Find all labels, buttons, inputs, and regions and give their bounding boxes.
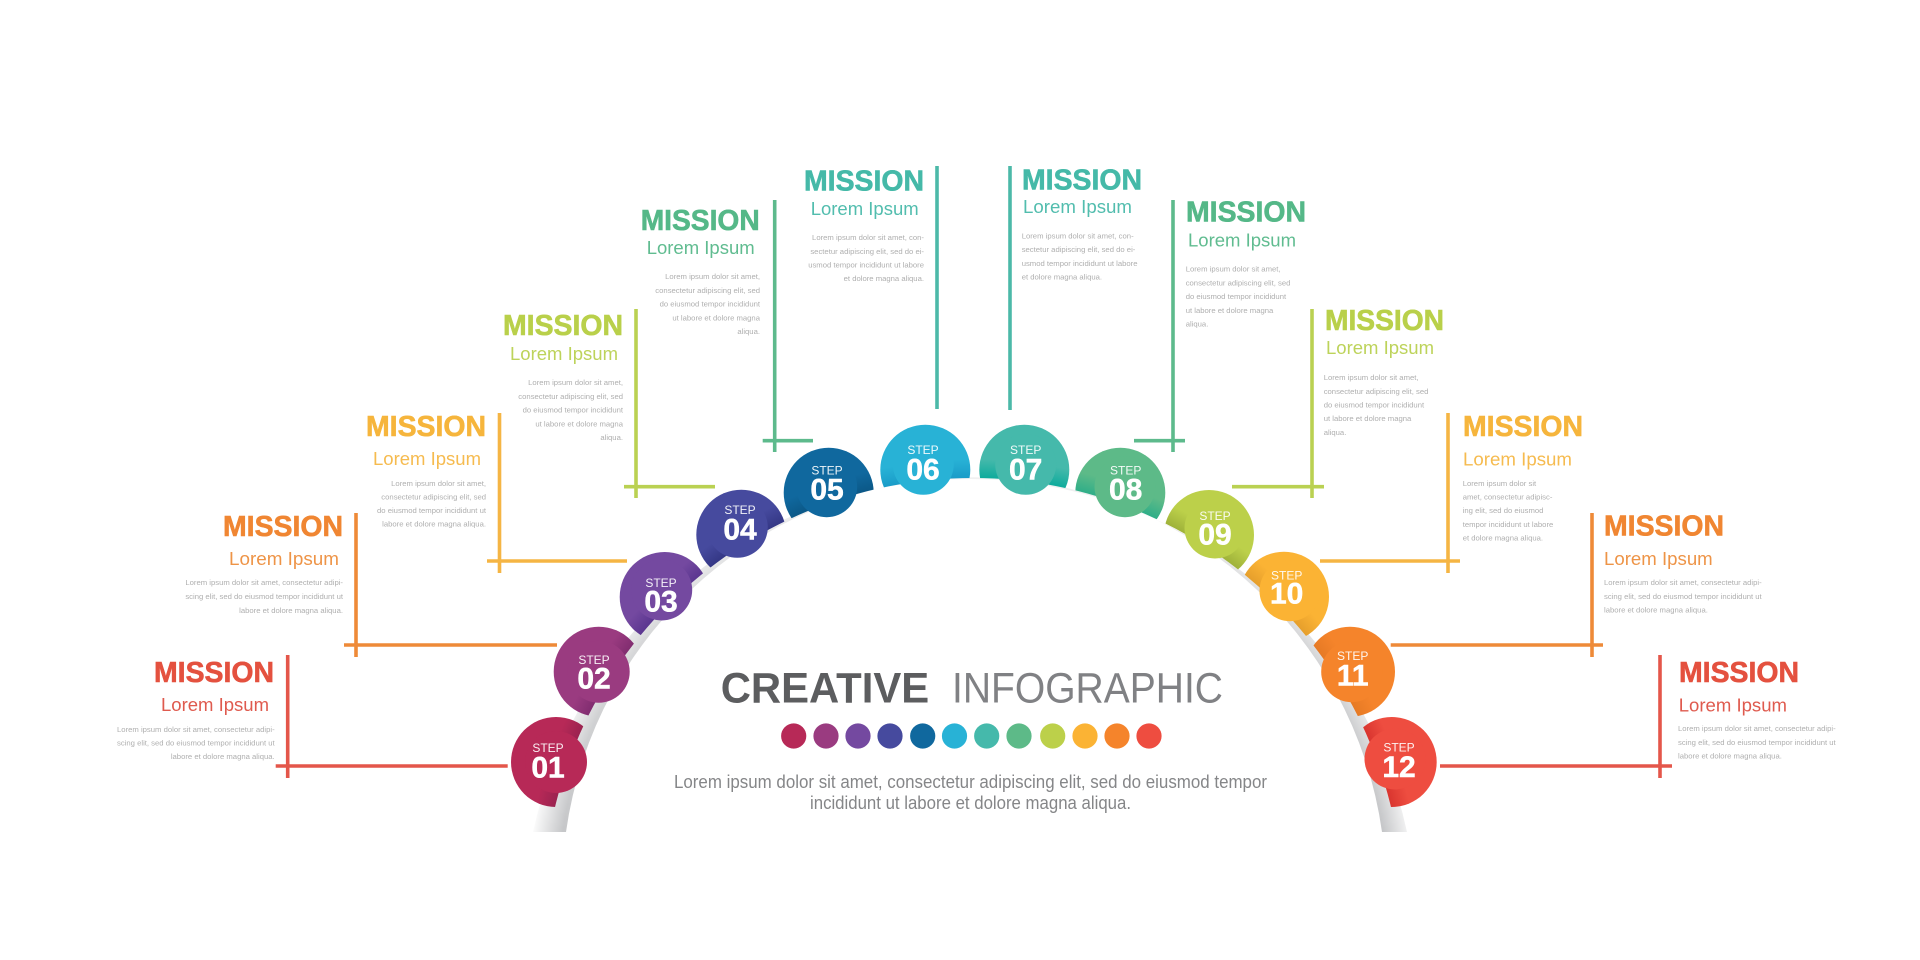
subheading 10: Lorem Ipsum <box>1463 449 1572 470</box>
intro paragraph: Lorem ipsum dolor sit amet, consectetur adipiscing elit, sed do eiusmod tempor <box>674 772 1267 792</box>
heading 02: MISSION <box>223 511 343 543</box>
description 06 <box>808 233 924 283</box>
description 10: Lorem ipsum dolor sit <box>1463 479 1537 488</box>
description 07: et dolore magna aliqua. <box>1022 273 1102 282</box>
description 05 <box>655 272 761 336</box>
subheading 01: Lorem Ipsum <box>161 694 269 715</box>
subheading 09: Lorem Ipsum <box>1326 337 1434 358</box>
step badge 06 <box>880 424 970 495</box>
step badge 01: 01 <box>531 752 565 784</box>
description 04: aliqua. <box>600 433 623 442</box>
description 05: Lorem ipsum dolor sit amet, <box>665 272 760 281</box>
description 10: et dolore magna aliqua. <box>1463 534 1543 543</box>
description 06: Lorem ipsum dolor sit amet, con- <box>812 233 924 242</box>
connector 12 <box>1440 655 1672 778</box>
step badge 01: STEP <box>532 741 564 755</box>
step badge 12: 12 <box>1382 751 1416 784</box>
title: CREATIVE <box>721 665 929 713</box>
description 05: consectetur adipiscing elit, sed <box>655 286 760 295</box>
intro paragraph <box>674 772 1267 813</box>
connector 03 <box>487 413 627 573</box>
description 03: Lorem ipsum dolor sit amet, <box>391 479 486 488</box>
description 02: scing elit, sed do eiusmod tempor incididunt ut <box>185 592 344 601</box>
panel: mission 07 <box>1010 164 1142 410</box>
step badge 10: STEP <box>1271 569 1302 583</box>
panel: mission 10 <box>1320 411 1583 573</box>
description 04: ut labore et dolore magna <box>535 419 624 428</box>
subheading 03: Lorem Ipsum <box>373 448 481 469</box>
description 12: labore et dolore magna aliqua. <box>1678 752 1782 761</box>
description 04: consectetur adipiscing elit, sed <box>518 392 623 401</box>
step badge 07: STEP <box>1010 443 1041 457</box>
description 03: do eiusmod tempor incididunt ut <box>377 506 487 515</box>
connector 11 <box>1391 513 1603 657</box>
step badge 11: 11 <box>1337 660 1369 692</box>
description 08 <box>1186 265 1290 329</box>
connector 07 <box>1008 166 1012 410</box>
description 07: sectetur adipiscing elit, sed do ei- <box>1022 245 1136 254</box>
connector 09 <box>1232 309 1324 498</box>
description 08: aliqua. <box>1186 320 1208 329</box>
step badge 04 <box>696 490 784 568</box>
step badge 12: STEP <box>1383 741 1415 755</box>
colour dot row <box>781 723 1162 749</box>
step badge 04: 04 <box>723 514 757 546</box>
subheading 07: Lorem Ipsum <box>1023 196 1132 217</box>
step badge 05: STEP <box>811 464 843 478</box>
subheading 04: Lorem Ipsum <box>510 343 618 364</box>
description 12: scing elit, sed do eiusmod tempor incididunt ut <box>1678 738 1837 747</box>
description 09: ut labore et dolore magna <box>1324 414 1412 423</box>
step badge 07 <box>979 424 1070 495</box>
description 03: labore et dolore magna aliqua. <box>382 520 486 529</box>
step badge 03: STEP <box>645 576 677 590</box>
description 01 <box>117 725 276 761</box>
description 06: et dolore magna aliqua. <box>844 274 924 283</box>
subheading 08: Lorem Ipsum <box>1188 230 1296 251</box>
panel: mission 12 <box>1440 655 1837 778</box>
step badge 10 <box>1244 552 1329 636</box>
description 08: consectetur adipiscing elit, sed <box>1186 279 1290 288</box>
panel: mission 04 <box>503 309 715 498</box>
panel: mission 08 <box>1134 197 1306 452</box>
description 12 <box>1678 724 1837 761</box>
description 11: Lorem ipsum dolor sit amet, consectetur adipi- <box>1604 578 1762 587</box>
intro paragraph: incididunt ut labore et dolore magna aliqua. <box>810 793 1131 813</box>
step badge 06: 06 <box>906 454 940 486</box>
step badge 03: 03 <box>644 586 678 618</box>
heading 01: MISSION <box>154 657 274 689</box>
description 10: ing elit, sed do eiusmod <box>1463 506 1543 515</box>
description 01: labore et dolore magna aliqua. <box>171 752 275 761</box>
step badge 07: 07 <box>1009 454 1042 486</box>
description 06: usmod tempor incididunt ut labore <box>808 261 924 270</box>
heading 09: MISSION <box>1325 305 1444 337</box>
panel: mission 03 <box>366 411 627 573</box>
panel: mission 02 <box>185 511 557 657</box>
description 12: Lorem ipsum dolor sit amet, consectetur adipi- <box>1678 724 1836 733</box>
description 10: amet, consectetur adipisc- <box>1463 493 1553 502</box>
description 01: Lorem ipsum dolor sit amet, consectetur adipi- <box>117 725 275 734</box>
panel: mission 01 <box>117 655 508 778</box>
description 07 <box>1022 232 1138 282</box>
heading 08: MISSION <box>1186 197 1306 229</box>
panel: mission 05 <box>641 200 813 452</box>
description 10: tempor incididunt ut labore <box>1463 520 1553 529</box>
description 09 <box>1324 373 1428 437</box>
description 08: Lorem ipsum dolor sit amet, <box>1186 265 1281 274</box>
description 06: sectetur adipiscing elit, sed do ei- <box>810 247 924 256</box>
description 04: do eiusmod tempor incididunt <box>523 406 624 415</box>
step badge 11: STEP <box>1337 649 1368 663</box>
connector 06 <box>935 166 939 409</box>
description 10 <box>1463 479 1553 543</box>
heading 04: MISSION <box>503 310 623 342</box>
step badge 06: STEP <box>907 443 939 457</box>
description 04: Lorem ipsum dolor sit amet, <box>528 378 623 387</box>
description 11: scing elit, sed do eiusmod tempor incididunt ut <box>1604 592 1763 601</box>
step badge 09 <box>1166 490 1254 570</box>
description 09: do eiusmod tempor incididunt <box>1324 401 1425 410</box>
step badge 02 <box>554 626 634 716</box>
description 02: Lorem ipsum dolor sit amet, consectetur adipi- <box>185 578 343 587</box>
heading 12: MISSION <box>1679 657 1799 689</box>
panel: mission 09 <box>1232 305 1444 498</box>
subheading 11: Lorem Ipsum <box>1604 548 1713 569</box>
step badge 12 <box>1363 717 1437 807</box>
connector 04 <box>624 309 715 498</box>
step badge 05: 05 <box>810 474 844 506</box>
connector 08 <box>1134 200 1185 452</box>
step badge 02: 02 <box>577 662 611 696</box>
heading 03: MISSION <box>366 411 486 443</box>
step badge 02: STEP <box>578 653 610 667</box>
subheading 05: Lorem Ipsum <box>647 237 755 258</box>
description 11 <box>1604 578 1763 615</box>
step badge 08: 08 <box>1109 474 1142 506</box>
subheading 06: Lorem Ipsum <box>811 198 919 219</box>
description 08: do eiusmod tempor incididunt <box>1186 292 1287 301</box>
description 07: Lorem ipsum dolor sit amet, con- <box>1022 232 1134 241</box>
heading 06: MISSION <box>804 166 924 198</box>
description 09: aliqua. <box>1324 428 1346 437</box>
step badge 08: STEP <box>1110 464 1141 478</box>
description 05: do eiusmod tempor incididunt <box>660 300 761 309</box>
title <box>721 665 1223 713</box>
step badge 04: STEP <box>724 503 756 517</box>
heading 10: MISSION <box>1463 411 1583 443</box>
description 03: consectetur adipiscing elit, sed <box>381 492 486 502</box>
description 02: labore et dolore magna aliqua. <box>239 606 343 615</box>
subheading 12: Lorem Ipsum <box>1679 695 1787 716</box>
heading 11: MISSION <box>1604 511 1724 543</box>
step badge 01 <box>511 717 587 807</box>
connector 02 <box>344 513 557 657</box>
description 09: consectetur adipiscing elit, sed <box>1324 387 1428 396</box>
step badge 10: 10 <box>1270 578 1303 610</box>
step badge 08 <box>1075 448 1166 520</box>
step badge 05 <box>784 448 874 518</box>
step badge 11 <box>1305 627 1395 717</box>
description 05: aliqua. <box>737 327 760 336</box>
heading 05: MISSION <box>641 205 760 237</box>
connector 05 <box>763 200 813 452</box>
connector 01 <box>276 655 508 778</box>
panel: mission 11 <box>1391 511 1763 657</box>
description 09: Lorem ipsum dolor sit amet, <box>1324 373 1419 382</box>
description 07: usmod tempor incididunt ut labore <box>1022 259 1138 268</box>
description 02 <box>185 578 344 615</box>
description 03 <box>377 479 487 529</box>
subheading 02: Lorem Ipsum <box>229 548 339 569</box>
connector 10 <box>1320 413 1460 573</box>
step badge 09: STEP <box>1199 509 1231 523</box>
description 11: labore et dolore magna aliqua. <box>1604 606 1708 615</box>
description 01: scing elit, sed do eiusmod tempor incididunt ut <box>117 738 276 748</box>
description 05: ut labore et dolore magna <box>672 314 761 322</box>
description 04 <box>518 378 624 442</box>
panel: mission 06 <box>804 166 937 409</box>
step badge 03 <box>620 552 703 636</box>
title: INFOGRAPHIC <box>952 665 1223 713</box>
grey arch <box>533 477 1407 832</box>
description 08: ut labore et dolore magna <box>1186 306 1274 315</box>
heading 07: MISSION <box>1022 164 1142 196</box>
step badge 09: 09 <box>1198 518 1232 552</box>
